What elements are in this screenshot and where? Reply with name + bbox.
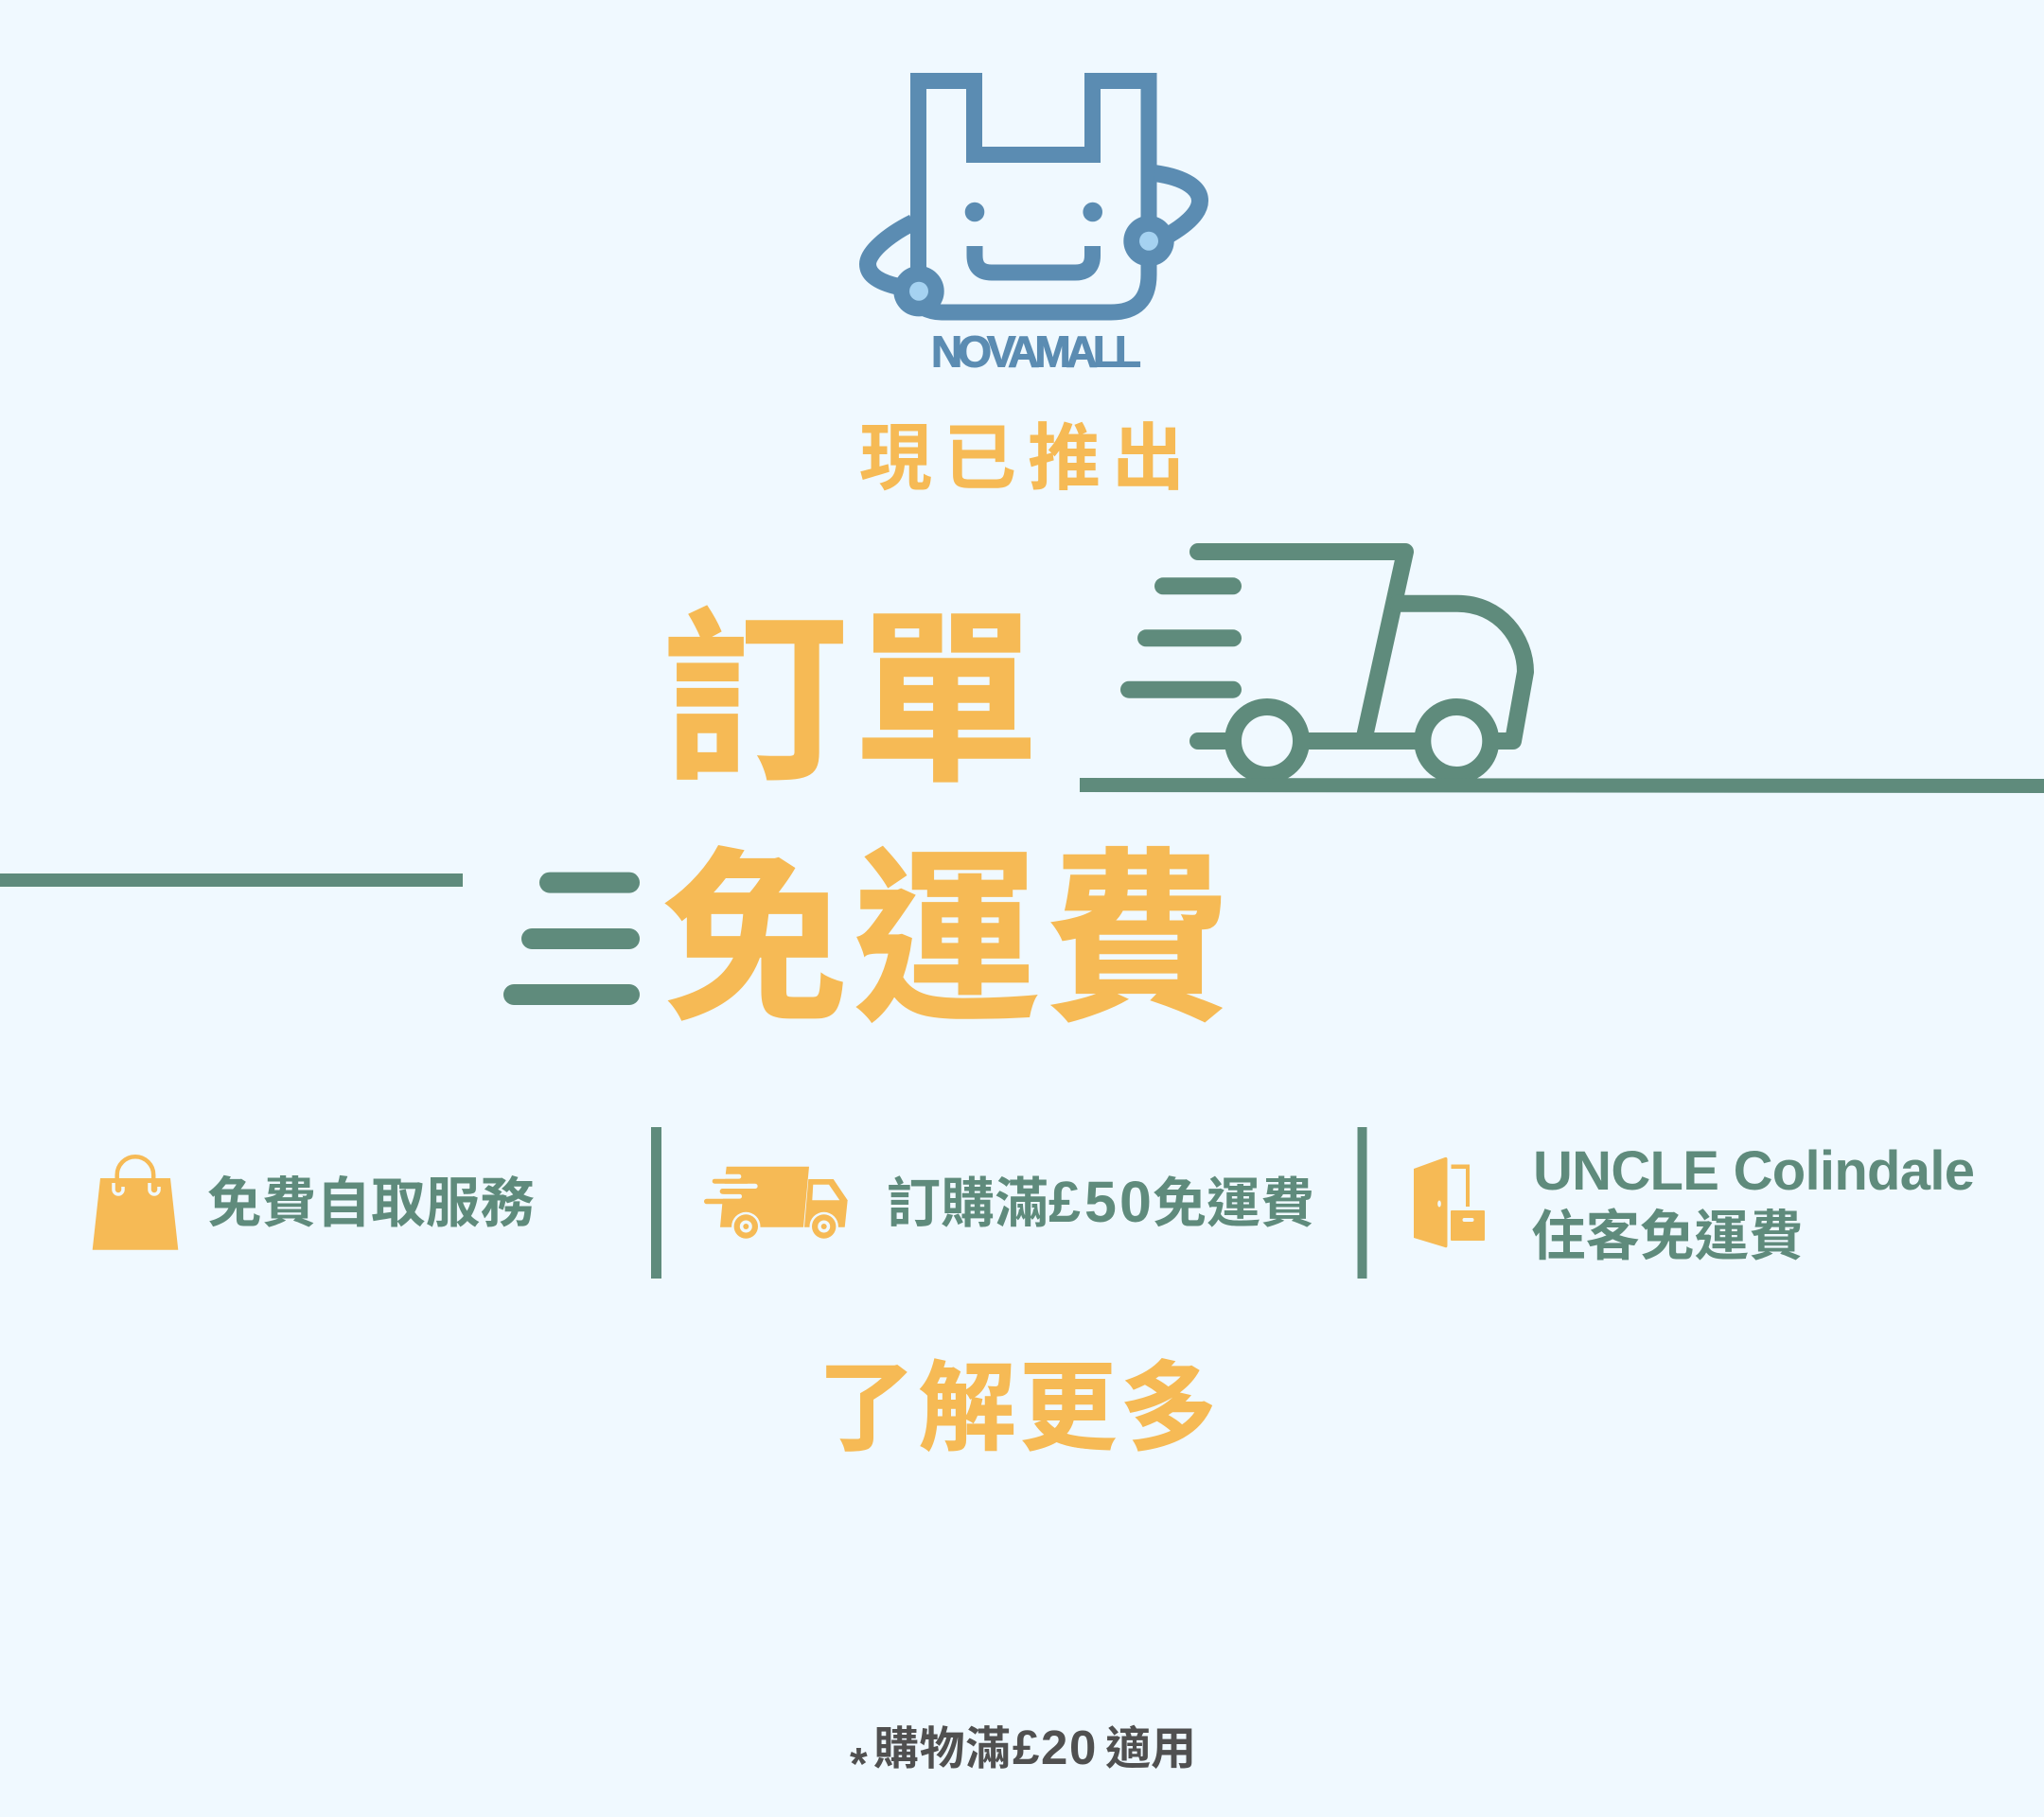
feature: free delivery over £50 (700, 1160, 1314, 1241)
label: £ (1048, 1170, 1081, 1234)
icon: small truck (700, 1167, 848, 1241)
footnote (850, 1711, 1196, 1790)
label: 訂 (887, 1160, 941, 1238)
title line 1: 訂單 (662, 551, 1045, 819)
feature: free pickup (93, 1156, 535, 1250)
feature: UNCLE Colindale residents (1414, 1140, 1975, 1271)
label: 0 (1119, 1170, 1152, 1234)
label: 費 (1260, 1160, 1314, 1238)
logo wordmark: NOVAMALL (931, 327, 1141, 377)
divider 2 (1357, 1127, 1366, 1279)
footnote text: 物 (920, 1711, 965, 1777)
footnote text: 適 (1105, 1711, 1151, 1777)
footnote text: 購 (873, 1711, 919, 1777)
icon: speeding delivery truck (1129, 552, 1525, 775)
title line 2: 免運費 (662, 791, 1236, 1058)
heading: now launched: 現已推出 (859, 400, 1196, 505)
footnote text: 0 (1069, 1720, 1096, 1774)
divider 1 (651, 1127, 661, 1279)
label: 5 (1084, 1170, 1117, 1234)
footnote text: £ (1013, 1720, 1039, 1774)
icon: shopping bag (93, 1156, 178, 1250)
call to action: 了解更多 (818, 1329, 1221, 1471)
label: 滿 (995, 1160, 1048, 1238)
logo: Nova Mall (868, 81, 1200, 377)
icon: bag wheels (893, 216, 1174, 316)
label: 免費自取服務 (207, 1158, 535, 1238)
footnote text: 滿 (965, 1711, 1011, 1777)
label: 免 (1153, 1160, 1207, 1238)
label line 2: 住客免運費 (1531, 1191, 1804, 1271)
icon: door and parcel (1414, 1157, 1485, 1247)
icon: bag mascot outline (868, 81, 1200, 312)
footnote text: 2 (1041, 1720, 1067, 1774)
footnote asterisk: * (850, 1739, 868, 1790)
footnote text: 用 (1151, 1711, 1196, 1777)
ground line left (0, 873, 463, 887)
label: 運 (1207, 1160, 1260, 1238)
ground line right (1080, 778, 2044, 793)
label: 購 (941, 1160, 995, 1238)
icon: eyes (965, 203, 1102, 221)
label line 1: UNCLE Colindale (1533, 1140, 1975, 1202)
speed lines beside title (514, 883, 629, 995)
